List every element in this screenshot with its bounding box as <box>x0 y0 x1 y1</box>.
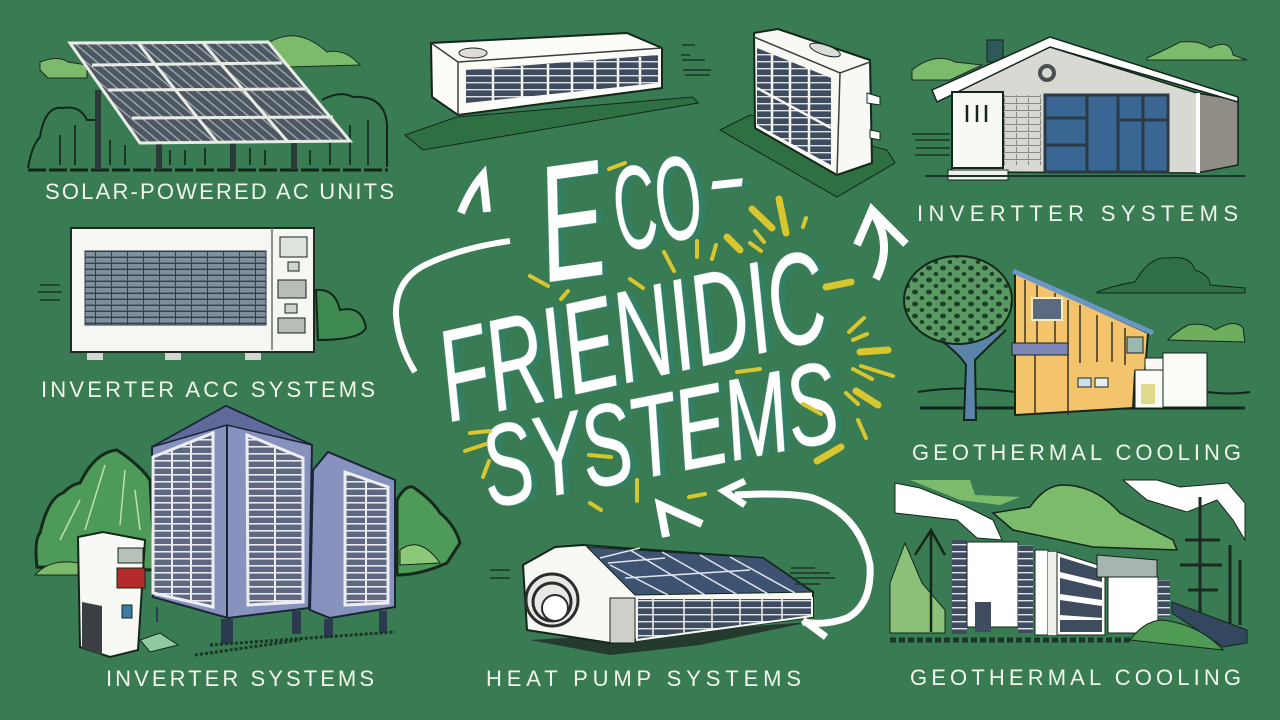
panel: top centre outdoor unit <box>720 29 895 197</box>
icon: house with unit <box>912 37 1247 180</box>
panel: solar-powered AC units <box>28 36 394 204</box>
panel: inverter AC systems <box>38 228 375 402</box>
panel: inverter systems (top right) <box>912 37 1247 226</box>
icon: large outdoor units <box>35 406 460 657</box>
icon: buildings and landscape <box>890 480 1247 650</box>
title: eco-friendly systems: CO <box>600 130 713 277</box>
arrow: left curve to top <box>396 175 510 372</box>
title: eco-friendly systems <box>424 125 848 533</box>
label: inverter systems: INVERTTER SYSTEMS <box>917 201 1238 226</box>
label: geothermal cooling: GEOTHERMAL COOLING <box>912 440 1241 465</box>
panel: heat pump systems <box>486 545 835 691</box>
panel: top centre indoor unit <box>405 33 711 150</box>
icon: tree and house <box>904 256 1250 420</box>
icon: AC unit on grass <box>405 33 711 150</box>
title: eco-friendly systems: E <box>526 125 618 317</box>
decorative yellow sparks around title <box>465 163 893 510</box>
label: heat pump systems: HEAT PUMP SYSTEMS <box>486 666 801 691</box>
icon: solar array <box>28 36 388 170</box>
label: inverter AC systems: INVERTER ACC SYSTEMS <box>41 377 375 402</box>
arrow: bottom curved to heat pump <box>660 481 870 637</box>
title: eco-friendly systems: - <box>700 126 750 230</box>
arrow: right pointing up <box>857 210 906 279</box>
panel: geothermal cooling (yellow house) <box>904 256 1250 465</box>
icon: heat pump unit <box>490 545 835 655</box>
title: eco-friendly systems: SYSTEMS <box>470 338 848 533</box>
panel: inverter systems (bottom left) <box>35 406 460 691</box>
icon: condenser unit <box>720 29 895 197</box>
title: eco-friendly systems: FRIENIDIC <box>424 222 839 449</box>
label: geothermal cooling: GEOTHERMAL COOLING <box>910 665 1241 690</box>
label: solar-powered AC units: SOLAR-POWERED AC UNITS <box>45 179 394 204</box>
icon: wall AC unit <box>38 228 366 360</box>
panel: geothermal cooling (city) <box>890 480 1247 690</box>
label: inverter systems: INVERTER SYSTEMS <box>106 666 374 691</box>
